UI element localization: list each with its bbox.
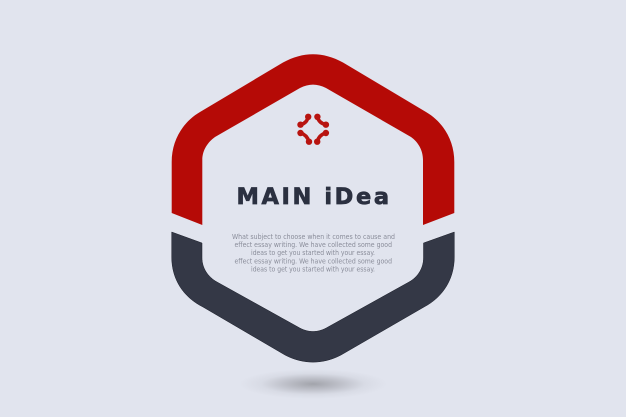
hexagon bottom band (dark) [172,232,454,362]
hexagon top band (red) [172,54,454,225]
body text [232,233,395,273]
body text: ideas to get you started with your essay. [251,249,375,257]
icon: red molecular ring [297,114,329,145]
body text: ideas to get you started with your essay. [251,265,375,273]
icon part: bottom left [297,130,312,145]
body text: What subject to choose when it comes to cause and [232,233,395,241]
icon part: top right [314,114,329,128]
icon part: top left [297,114,311,128]
body text: effect essay writing. We have collected some good [234,241,392,249]
icon part: bottom right [314,130,329,145]
body text: effect essay writing. We have collected some good [234,257,392,265]
ground shadow [239,369,387,399]
title: MAIN iDea [236,184,389,210]
